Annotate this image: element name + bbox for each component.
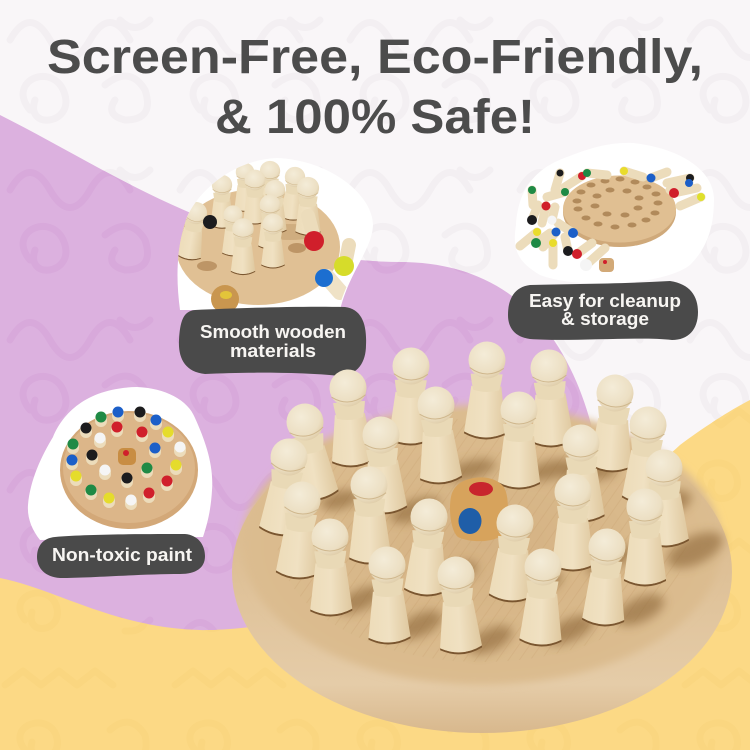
photo: board from above with coloured pegs [28, 387, 212, 540]
die [450, 477, 508, 541]
panel: easy for cleanup and storage [508, 143, 714, 340]
title: & 100% Safe! [215, 91, 535, 144]
label: Easy for cleanup and storage: & storage [561, 308, 649, 329]
panel: non-toxic paint [28, 387, 212, 578]
main photo: wooden memory chess board [232, 341, 732, 733]
label: Non-toxic paint: Non-toxic paint [52, 544, 192, 565]
panel: smooth wooden materials [175, 158, 373, 376]
background: purple wave [0, 115, 600, 650]
photo: pegs scattered around board [515, 143, 714, 284]
photo: close-up of board and pegs [175, 158, 373, 313]
background: yellow wave [0, 400, 750, 750]
peg shadows [318, 455, 728, 660]
label: Smooth wooden materials: materials [230, 340, 316, 361]
pegs front rows [276, 448, 689, 656]
label: Non-toxic paint [37, 534, 205, 578]
title [47, 31, 703, 144]
board [232, 405, 732, 733]
label: Easy for cleanup and storage: Easy for cleanup [529, 290, 681, 311]
title: Screen-Free, Eco-Friendly, [47, 31, 703, 84]
label: Easy for cleanup and storage [508, 281, 698, 340]
pegs back row [258, 341, 670, 538]
label: Smooth wooden materials [179, 307, 366, 376]
label: Smooth wooden materials: Smooth wooden [200, 321, 346, 342]
